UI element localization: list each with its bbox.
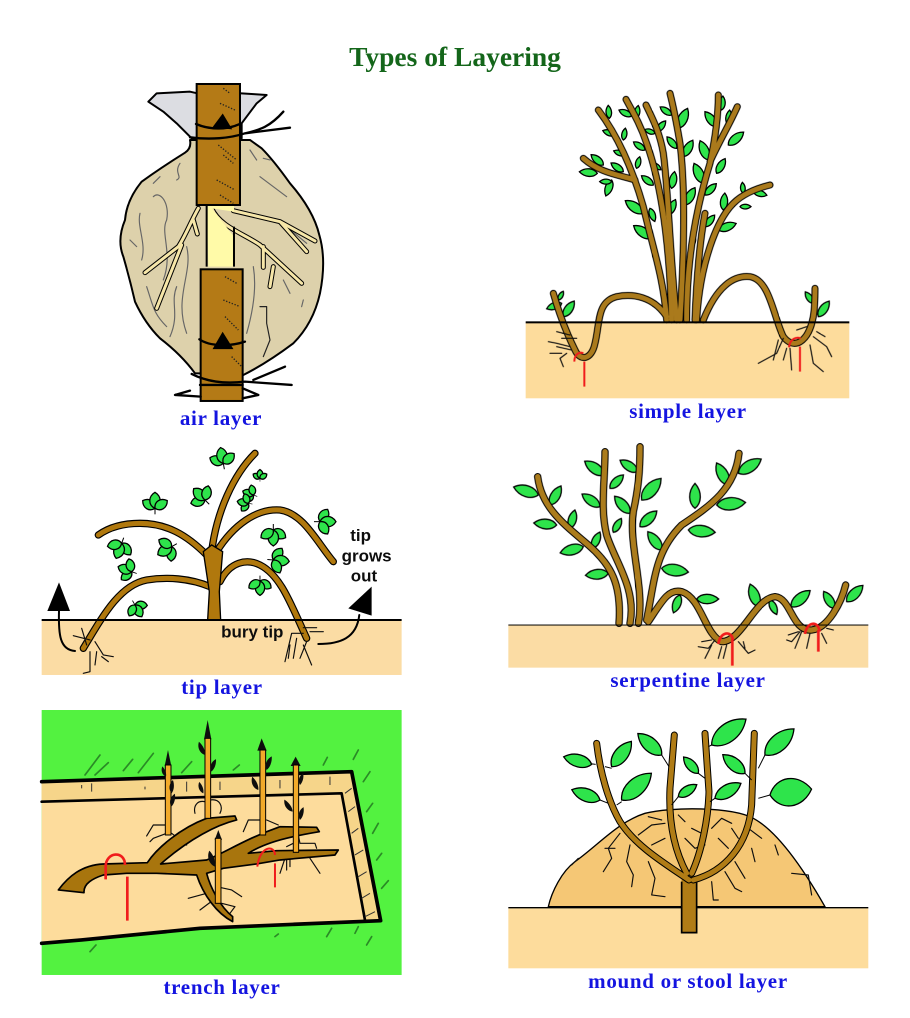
branches — [553, 93, 815, 357]
moss texture — [130, 150, 307, 357]
bark speckle — [217, 88, 242, 367]
illustration: serpentine layer shrub — [508, 447, 868, 668]
trunk — [682, 877, 697, 933]
trench wall — [42, 772, 382, 922]
leaves — [545, 96, 833, 319]
panel: tip layer — [42, 445, 402, 699]
caption: tip layer: tip layer — [181, 675, 263, 699]
grass marks — [85, 750, 388, 952]
trench bed — [42, 772, 382, 943]
trench outline — [42, 772, 381, 943]
roots — [73, 628, 113, 673]
grass background — [42, 710, 402, 975]
roots — [572, 815, 812, 900]
trunk — [203, 545, 223, 620]
mound — [548, 809, 825, 907]
roots — [147, 800, 320, 913]
shoots — [161, 720, 306, 903]
illustration: tip layer shrub — [42, 445, 402, 675]
label: tip grows out: tip — [350, 526, 371, 545]
label: tip grows out: grows — [342, 547, 392, 566]
caption: simple layer: simple layer — [629, 399, 747, 423]
leaves — [512, 454, 866, 616]
soil — [508, 908, 868, 968]
label: bury tip: bury tip — [221, 623, 283, 642]
branches — [597, 733, 754, 880]
ground line — [42, 617, 402, 623]
illustration: air layer bag on stem — [120, 84, 323, 401]
branches — [83, 453, 333, 648]
soil — [526, 322, 849, 398]
knots and ties — [214, 115, 231, 128]
panel: trench layer — [42, 710, 402, 999]
panel: simple layer — [526, 93, 849, 423]
caption: air layer: air layer — [180, 406, 262, 430]
plastic wrap top — [148, 92, 267, 138]
ground line — [508, 906, 868, 910]
roots — [548, 332, 577, 367]
ground line — [508, 623, 868, 626]
leaf clusters — [102, 445, 336, 623]
panel: mound or stool layer — [508, 712, 868, 993]
label: tip grows out — [342, 526, 392, 586]
upper stem — [197, 84, 240, 205]
leaves — [562, 712, 813, 809]
branches — [58, 816, 338, 922]
caption: trench layer: trench layer — [163, 975, 281, 999]
caption: serpentine layer: serpentine layer — [610, 668, 766, 692]
panel: serpentine layer — [508, 447, 868, 692]
illustration: trench layer — [42, 710, 402, 975]
roots — [145, 208, 315, 308]
soil — [42, 620, 402, 675]
arrow: left tip upward — [47, 582, 75, 651]
arrow: right tip upward — [318, 587, 372, 644]
label: tip grows out: out — [351, 567, 378, 586]
caption: mound or stool layer: mound or stool layer — [588, 969, 788, 993]
panel: air layer — [120, 84, 323, 430]
illustration: simple layer shrub — [526, 93, 849, 398]
lower stem — [201, 269, 243, 401]
soil — [508, 625, 868, 668]
pins — [718, 633, 733, 666]
ground line — [526, 319, 849, 325]
illustration: mound layer — [508, 712, 868, 968]
moss bag — [120, 140, 323, 375]
exposed wood — [207, 205, 234, 267]
pins — [106, 849, 275, 921]
branches — [538, 447, 846, 642]
roots — [698, 640, 755, 658]
wall texture — [82, 777, 375, 917]
pins — [574, 353, 584, 387]
title: Types of Layering — [349, 41, 561, 72]
